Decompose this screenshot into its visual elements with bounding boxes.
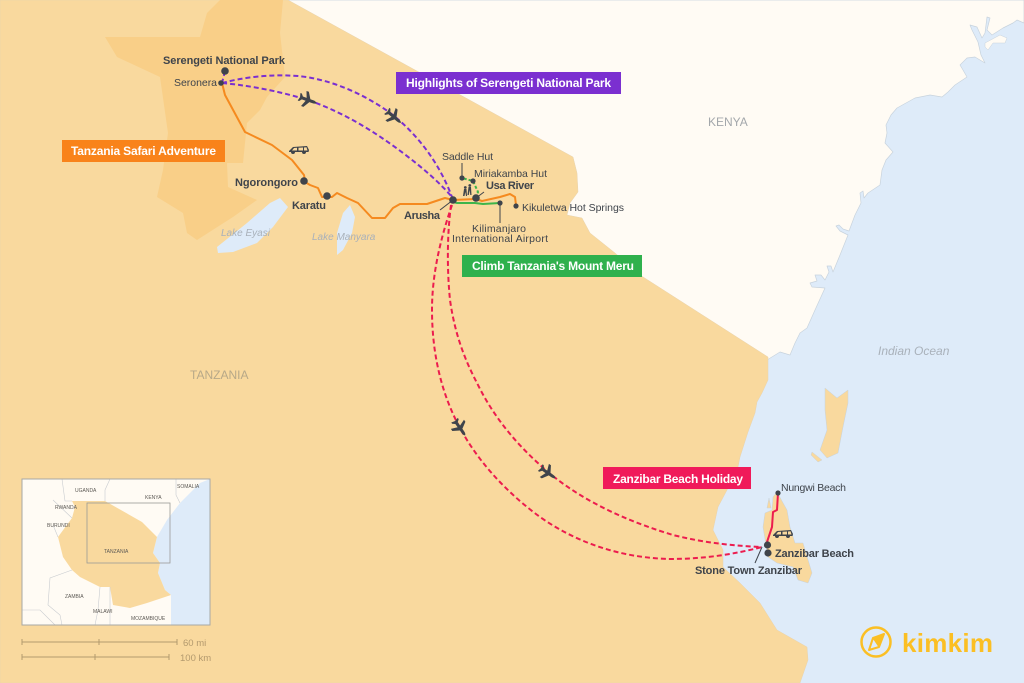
inset locator map: SOMALIA [177, 484, 200, 490]
route: Zanzibar road (red) [767, 493, 778, 542]
place names [163, 55, 854, 577]
map labels: TANZANIA [190, 368, 248, 382]
tag: Climb Tanzania's Mount Meru [462, 255, 642, 277]
place names: Ngorongoro [235, 177, 298, 189]
inset locator map: ZAMBIA [65, 594, 84, 600]
inset locator map: TANZANIA [104, 549, 129, 555]
place names: Kikuletwa Hot Springs [522, 202, 624, 214]
map labels [190, 115, 950, 382]
scale bars [22, 638, 211, 664]
map labels: Lake Manyara [312, 232, 376, 243]
place names: Seronera [174, 77, 217, 89]
Serengeti National Park area [105, 0, 285, 240]
place names: Saddle Hut [442, 151, 493, 163]
Lake Manyara [337, 205, 355, 255]
place names: Arusha [404, 210, 441, 222]
land: Tanzania [0, 0, 808, 683]
land: small island in bay [985, 35, 1007, 50]
inset locator map [22, 479, 210, 625]
Lake Eyasi [217, 198, 288, 253]
logo: kimkim [862, 628, 993, 658]
Pemba island [811, 388, 848, 462]
inset locator map: BURUNDI [47, 523, 70, 529]
leader lines [440, 163, 762, 563]
place names: Zanzibar Beach [775, 548, 854, 560]
tag: Tanzania Safari Adventure [62, 140, 225, 162]
tag: Zanzibar Beach Holiday [603, 467, 751, 489]
inset locator map: RWANDA [55, 505, 78, 511]
tag: Tanzania Safari Adventure: Tanzania Safari Adventure [71, 144, 216, 158]
flight arcs: Serengeti (purple) [222, 71, 452, 197]
map labels: KENYA [708, 115, 748, 129]
place names: Kilimanjaro [472, 223, 526, 235]
icon: planes [296, 89, 560, 485]
logo: kimkim: kimkim [902, 628, 993, 658]
place names: Serengeti National Park [163, 55, 286, 67]
tag: Highlights of Serengeti National Park: Highlights of Serengeti National Park [406, 76, 611, 90]
flight arcs: Zanzibar (red) [432, 205, 762, 559]
land: Kenya [280, 0, 1024, 400]
place names: Karatu [292, 200, 326, 212]
place names: International Airport [452, 233, 548, 245]
icon: hikers [463, 184, 472, 196]
inset locator map: MALAWI [93, 609, 113, 615]
scale bars: 60 mi [183, 638, 206, 649]
tag: Highlights of Serengeti National Park [396, 72, 621, 94]
route: safari (orange) [222, 83, 516, 218]
place names: Miriakamba Hut [474, 168, 547, 180]
tag: Zanzibar Beach Holiday: Zanzibar Beach Holiday [613, 472, 743, 486]
place names: Nungwi Beach [781, 482, 846, 494]
place names: Stone Town Zanzibar [695, 565, 803, 577]
route: Meru (green) [453, 178, 500, 204]
inset locator map: MOZAMBIQUE [131, 616, 166, 622]
place names: Usa River [486, 180, 535, 192]
tag: Climb Tanzania's Mount Meru: Climb Tanzania's Mount Meru [472, 259, 634, 273]
stops [218, 67, 781, 557]
Zanzibar island [763, 492, 812, 583]
icon: cars [289, 146, 793, 538]
map labels: Lake Eyasi [221, 228, 271, 239]
inset locator map: KENYA [145, 495, 162, 501]
map labels: Indian Ocean [878, 344, 950, 358]
inset locator map: UGANDA [75, 488, 97, 494]
scale bars: 100 km [180, 653, 211, 664]
